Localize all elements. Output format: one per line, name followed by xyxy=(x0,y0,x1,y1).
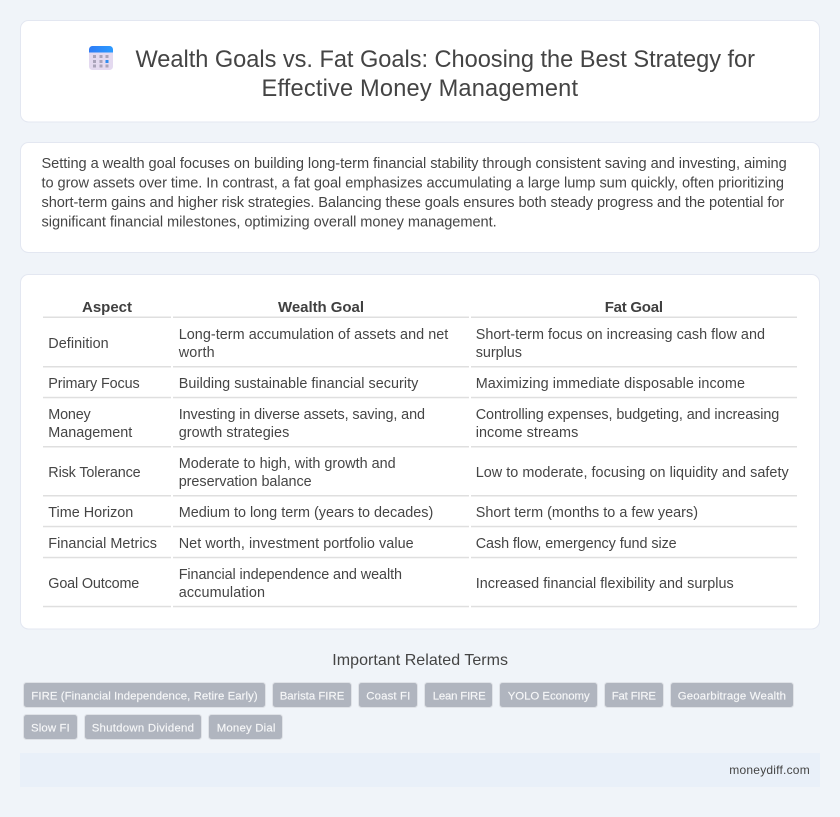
row: definition: Long-term accumulation of assets and net xyxy=(179,327,448,343)
row: money management: Investing in diverse assets, saving, and xyxy=(179,407,425,423)
table header row xyxy=(82,299,663,316)
tag xyxy=(500,682,598,708)
row: definition: Short-term focus on increasing cash flow and xyxy=(476,327,765,343)
row: goal outcome xyxy=(48,567,734,601)
tag xyxy=(604,682,664,708)
tag xyxy=(670,682,794,708)
row: goal outcome: Increased financial flexibility and surplus xyxy=(476,576,734,592)
tag: Coast FI xyxy=(366,690,410,702)
table header row: Aspect xyxy=(82,299,132,316)
row: money management xyxy=(48,407,779,441)
tag: Lean FIRE xyxy=(433,690,486,702)
row: goal outcome: accumulation xyxy=(179,585,265,601)
table header row: Fat Goal xyxy=(605,299,663,316)
row: goal outcome: Goal Outcome xyxy=(48,576,139,592)
tag: Barista FIRE xyxy=(280,690,345,702)
row: money management: growth strategies xyxy=(179,425,289,441)
row: financial metrics xyxy=(48,536,677,552)
tag xyxy=(208,714,282,740)
footer xyxy=(20,753,820,787)
tag xyxy=(24,682,266,708)
tag xyxy=(24,714,78,740)
intro text: to grow assets over time. In contrast, a fat goal emphasizes accumulating a large lump sum quickly, often prioritizing xyxy=(42,176,784,192)
row: money management: Controlling expenses, budgeting, and increasing xyxy=(476,407,779,423)
row: financial metrics: Financial Metrics xyxy=(48,536,157,552)
row: money management: Money xyxy=(48,407,91,423)
row: financial metrics: Cash flow, emergency fund size xyxy=(476,536,677,552)
table header row: Wealth Goal xyxy=(278,299,364,316)
tag xyxy=(272,682,352,708)
intro text: Setting a wealth goal focuses on building long-term financial stability through consistent saving and investing, aiming xyxy=(42,156,787,172)
tag: Fat FIRE xyxy=(612,690,656,702)
tag xyxy=(84,714,202,740)
footer: moneydiff.com xyxy=(729,763,810,777)
row: risk tolerance: Moderate to high, with growth and xyxy=(179,456,396,472)
tag: Money Dial xyxy=(217,722,275,734)
intro text: short-term gains and higher risk strategies. Balancing these goals ensures both steady progress and the potential for xyxy=(42,195,784,211)
title xyxy=(136,47,755,102)
heading: important related terms: Important Related Terms xyxy=(332,652,508,669)
row: primary focus xyxy=(48,376,745,392)
tags: related terms xyxy=(24,682,794,740)
row: definition: worth xyxy=(178,345,215,361)
intro panel xyxy=(20,142,820,252)
row: risk tolerance: Risk Tolerance xyxy=(48,465,141,481)
intro text: significant financial milestones, optimizing overall money management. xyxy=(42,215,497,231)
row: time horizon: Medium to long term (years to decades) xyxy=(179,505,433,521)
icon: calendar xyxy=(89,46,113,70)
tag: Slow FI xyxy=(31,722,70,734)
row: goal outcome: Financial independence and wealth xyxy=(179,567,402,583)
row: financial metrics: Net worth, investment portfolio value xyxy=(179,536,414,552)
row: definition: Definition xyxy=(48,336,109,352)
table panel xyxy=(20,274,820,629)
tag: FIRE (Financial Independence, Retire Early) xyxy=(31,690,258,702)
row: time horizon: Short term (months to a few years) xyxy=(476,505,698,521)
header panel xyxy=(20,20,820,122)
tag: Geoarbitrage Wealth xyxy=(678,690,786,702)
row: time horizon xyxy=(48,505,698,521)
title: Wealth Goals vs. Fat Goals: Choosing the Best Strategy for xyxy=(136,47,755,73)
row: primary focus: Building sustainable financial security xyxy=(179,376,419,392)
tag: Shutdown Dividend xyxy=(92,722,194,734)
intro text xyxy=(42,156,787,231)
row: definition xyxy=(48,327,765,361)
row: risk tolerance: preservation balance xyxy=(179,474,312,490)
row: risk tolerance: Low to moderate, focusing on liquidity and safety xyxy=(476,465,789,481)
row: risk tolerance xyxy=(48,456,789,490)
tag: YOLO Economy xyxy=(508,690,590,702)
tag xyxy=(358,682,418,708)
title: Effective Money Management xyxy=(262,76,578,102)
row: primary focus: Primary Focus xyxy=(48,376,140,392)
row: money management: income streams xyxy=(476,425,578,441)
row: time horizon: Time Horizon xyxy=(48,505,133,521)
row: money management: Management xyxy=(48,425,132,441)
row: primary focus: Maximizing immediate disposable income xyxy=(476,376,745,392)
tag xyxy=(424,682,492,708)
row: definition: surplus xyxy=(476,345,522,361)
